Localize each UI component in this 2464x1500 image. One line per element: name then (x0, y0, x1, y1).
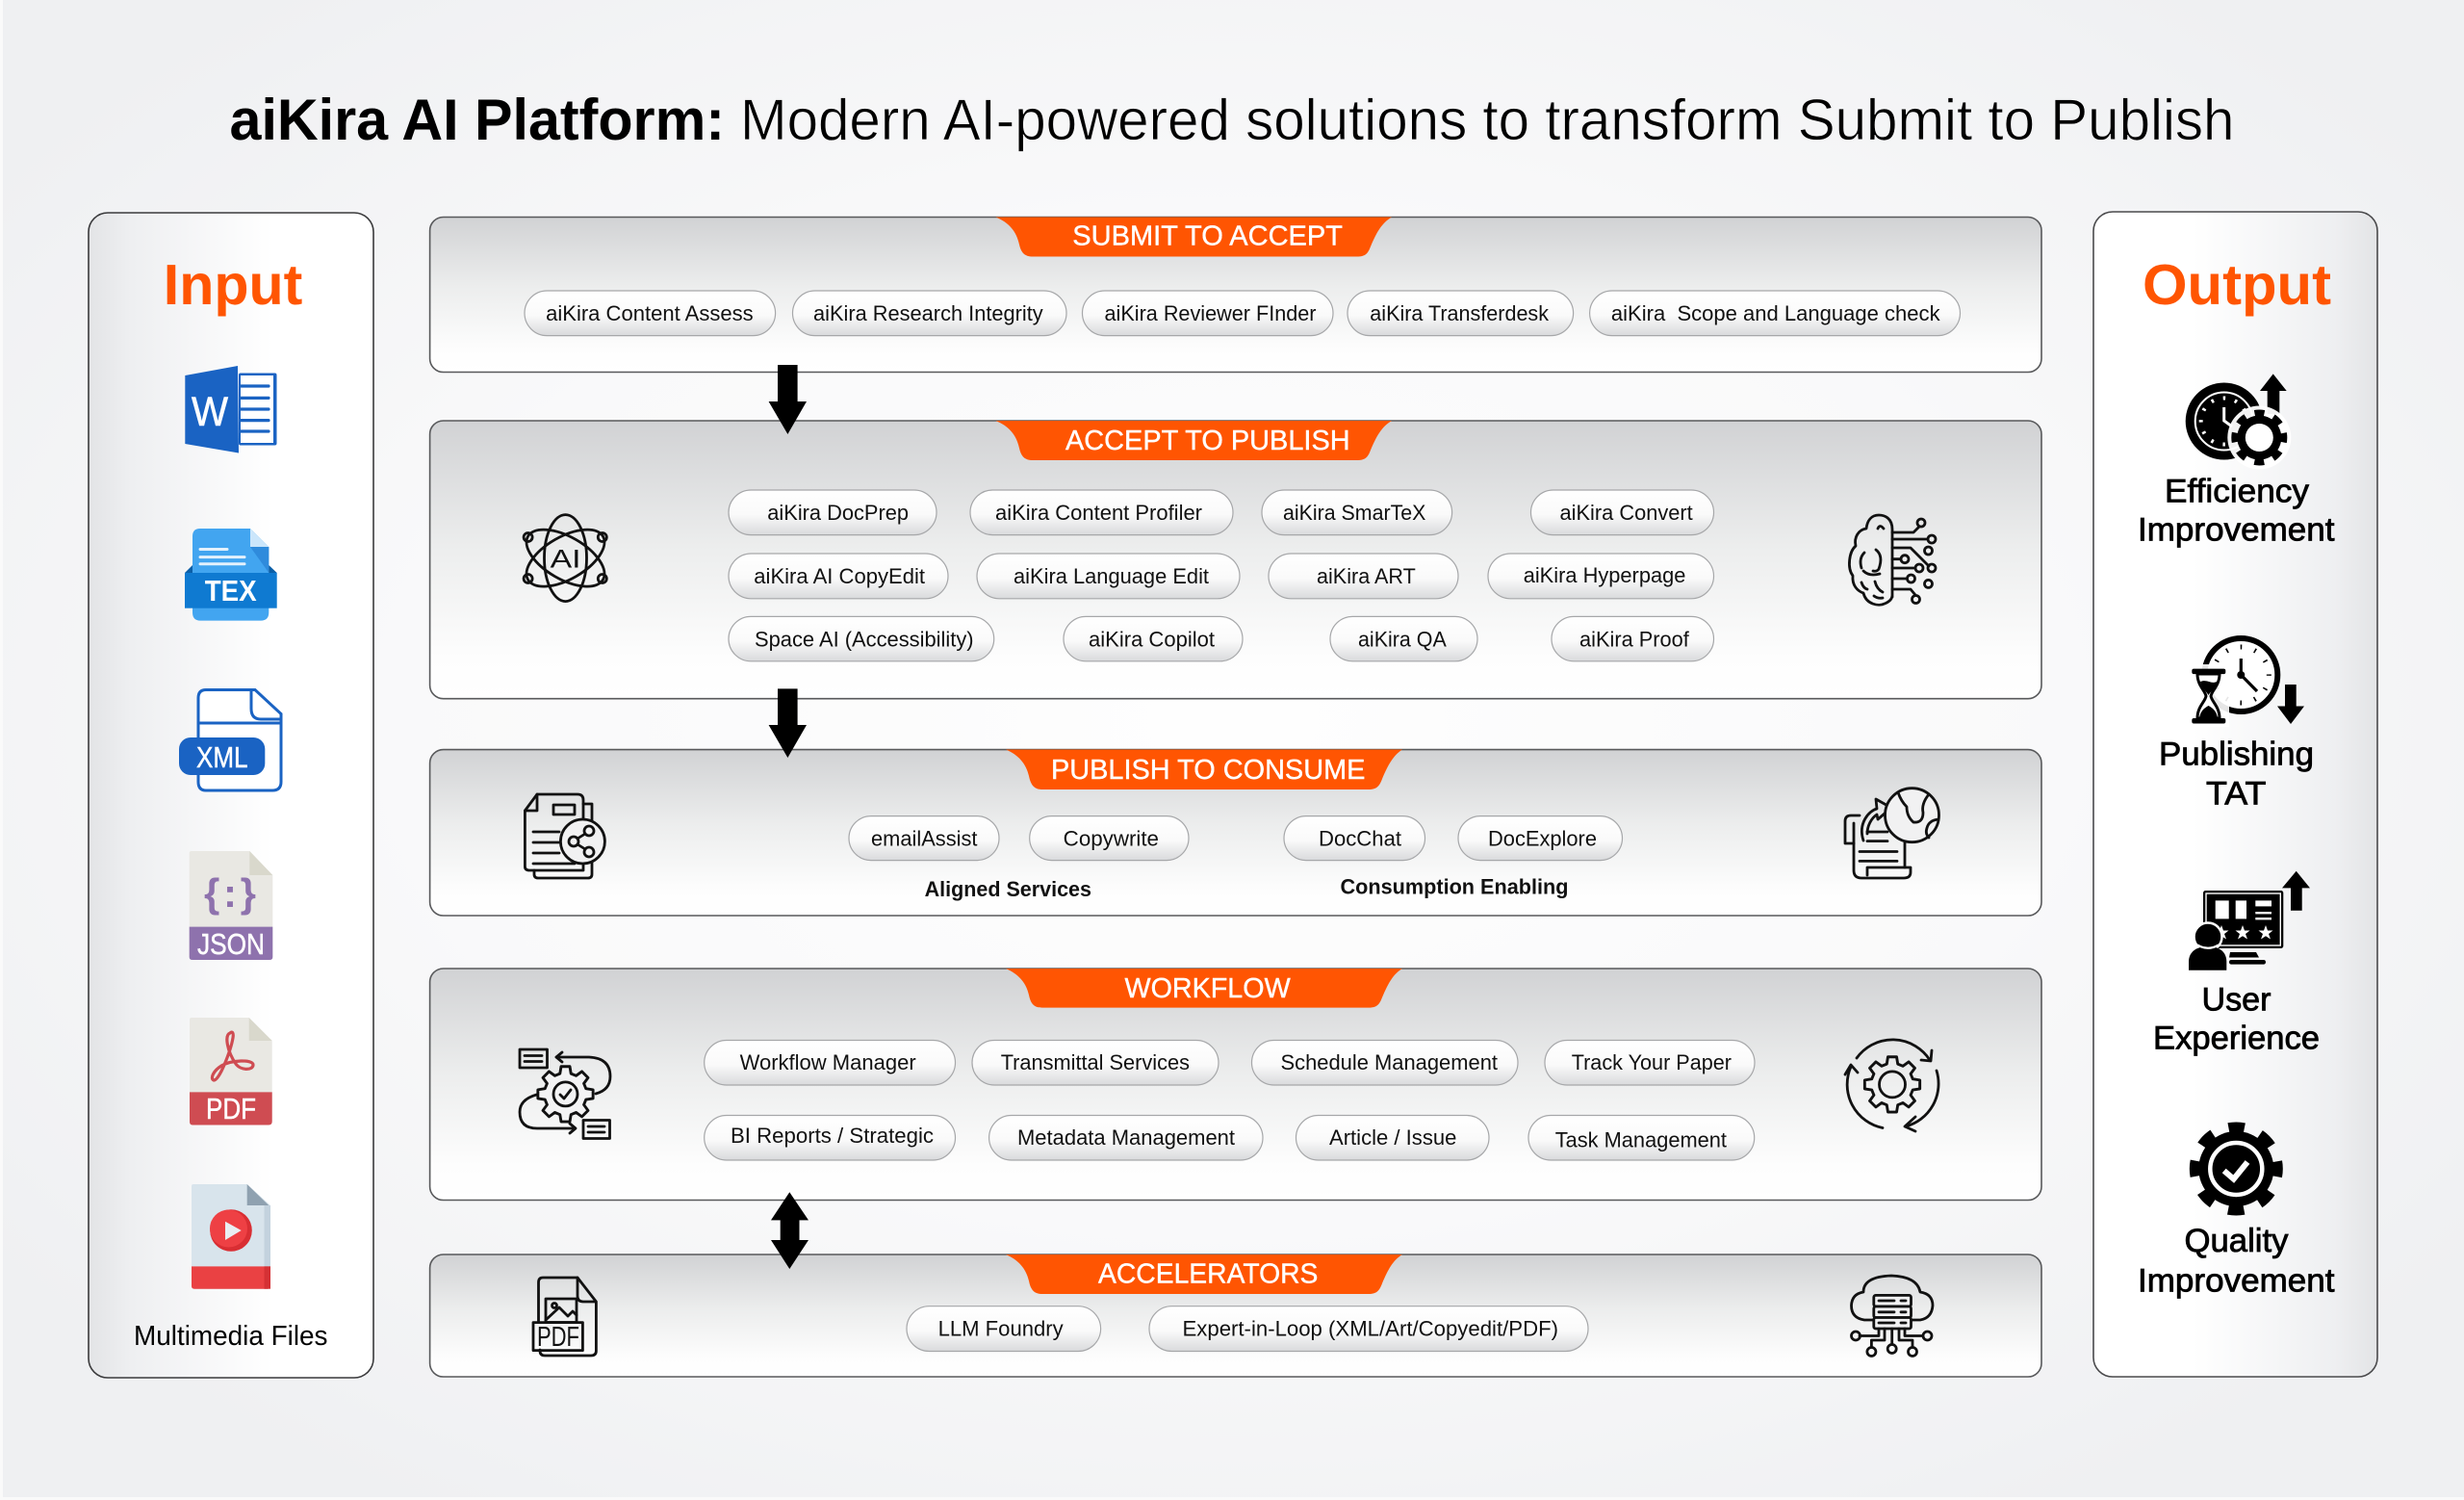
icon: ai atom (518, 515, 613, 602)
pill: llm foundry (907, 1306, 1101, 1352)
icon: json file (190, 851, 272, 961)
tab: workflow: WORKFLOW (1124, 973, 1291, 1004)
title: Modern AI-powered solutions to transform Submit to Publish (740, 88, 2235, 152)
pill: docexplore: DocExplore (1488, 826, 1597, 850)
pill: space ai (729, 616, 994, 661)
icon: cycle gear (1845, 1040, 1938, 1131)
label: user experience: Experience (2153, 1021, 2320, 1057)
icon: pdf file: PDF (206, 1092, 256, 1125)
pill: docexplore (1458, 816, 1623, 861)
icon: publishing tat (2188, 638, 2304, 727)
pill: scope and language check: aiKira Scope and Language check (1611, 301, 1941, 325)
panel: submit to accept (430, 218, 2041, 372)
pill: convert: aiKira Convert (1559, 501, 1693, 525)
panel: accelerators (430, 1254, 2041, 1377)
heading: input: Input (164, 253, 302, 317)
pill: emailassist (849, 816, 999, 861)
pill: expert in loop (1149, 1306, 1588, 1352)
arrow: accept-publish to publish-consume (769, 688, 807, 758)
pill: copywrite: Copywrite (1064, 826, 1159, 850)
pill: language edit: aiKira Language Edit (1014, 564, 1209, 588)
label: efficiency improvement: Improvement (2138, 512, 2335, 549)
icon: json file: JSON (197, 927, 265, 961)
pill: llm foundry: LLM Foundry (938, 1317, 1064, 1340)
pill: docprep: aiKira DocPrep (767, 501, 909, 525)
pill: copilot: aiKira Copilot (1089, 627, 1215, 651)
label: aligned services: Aligned Services (925, 877, 1091, 901)
title: aiKira AI Platform: (229, 88, 725, 152)
icon: efficiency (2186, 374, 2291, 470)
icon: pdf file (190, 1018, 272, 1125)
pill: proof (1552, 616, 1713, 661)
tab: accept to publish (995, 421, 1392, 460)
label: quality improvement (2138, 1223, 2335, 1299)
pill: transmittal services (972, 1040, 1219, 1085)
pill: space ai: Space AI (Accessibility) (755, 627, 974, 651)
tab: workflow (1006, 969, 1402, 1008)
pill: workflow manager (705, 1040, 955, 1085)
icon: xml file: XML (196, 740, 248, 774)
tab: publish to consume (1006, 749, 1402, 789)
pill: track your paper: Track Your Paper (1572, 1050, 1732, 1074)
pill: transmittal services: Transmittal Services (1001, 1050, 1190, 1074)
pill: docchat: DocChat (1319, 826, 1401, 850)
icon: shared document (525, 794, 604, 878)
panel: publish to consume (430, 749, 2041, 916)
label: publishing tat: TAT (2206, 776, 2266, 813)
pill: article issue (1296, 1115, 1489, 1160)
arrow: submit to accept-publish (769, 365, 807, 434)
icon: xml file (179, 689, 281, 790)
pill: copywrite (1030, 816, 1189, 861)
pill: content profiler (970, 490, 1233, 535)
pill: art (1269, 554, 1458, 599)
pill: ai copyedit (729, 554, 948, 599)
tab: submit to accept (995, 218, 1392, 256)
pill: schedule management (1251, 1040, 1518, 1085)
icon: tex file (185, 529, 277, 621)
pill: smartex (1262, 490, 1452, 535)
label: publishing tat (2159, 737, 2314, 813)
label: user experience (2153, 981, 2320, 1057)
icon: pdf document: PDF (537, 1322, 579, 1353)
pill: proof: aiKira Proof (1579, 627, 1690, 651)
panel: input (89, 213, 373, 1378)
pill: research integrity (793, 291, 1066, 336)
pill: emailassist: emailAssist (871, 826, 978, 850)
pill: art: aiKira ART (1317, 564, 1416, 588)
icon: workflow gear (520, 1049, 610, 1138)
icon: ai atom: AI (551, 544, 581, 573)
pill: copilot (1064, 616, 1243, 661)
pill: expert in loop: Expert-in-Loop (XML/Art/Copyedit/PDF) (1182, 1317, 1558, 1340)
pill: scope and language check (1590, 291, 1960, 336)
label: efficiency improvement: Efficiency (2165, 473, 2310, 509)
pill: metadata management: Metadata Management (1017, 1125, 1235, 1150)
icon: word file (185, 366, 277, 453)
icon: pdf document (533, 1278, 596, 1356)
pill: ai copyedit: aiKira AI CopyEdit (754, 564, 925, 588)
icon: globe publishing (1845, 789, 1938, 878)
pill: hyperpage (1488, 554, 1713, 599)
pill: reviewer finder: aiKira Reviewer FInder (1105, 301, 1317, 325)
pill: docprep (729, 490, 937, 535)
tab: submit to accept: SUBMIT TO ACCEPT (1072, 221, 1343, 252)
pill: task management: Task Management (1555, 1128, 1727, 1151)
pill: track your paper (1545, 1040, 1755, 1085)
pill: bi reports (705, 1115, 955, 1160)
pill: task management (1528, 1115, 1755, 1160)
icon: user experience (2189, 871, 2310, 970)
panel: workflow (430, 969, 2041, 1200)
heading: output: Output (2143, 253, 2331, 317)
label: quality improvement: Improvement (2138, 1262, 2335, 1299)
tab: accelerators: ACCELERATORS (1098, 1258, 1318, 1289)
pill: content profiler: aiKira Content Profiler (995, 501, 1202, 525)
pill: transferdesk (1348, 291, 1574, 336)
pill: schedule management: Schedule Management (1280, 1050, 1498, 1074)
tab: publish to consume: PUBLISH TO CONSUME (1051, 755, 1365, 786)
pill: content assess (525, 291, 776, 336)
pill: transferdesk: aiKira Transferdesk (1370, 301, 1550, 325)
pill: bi reports: BI Reports / Strategic (731, 1124, 934, 1148)
pill: workflow manager: Workflow Manager (740, 1050, 916, 1074)
pill: content assess: aiKira Content Assess (546, 301, 754, 325)
pill: language edit (977, 554, 1240, 599)
pill: article issue: Article / Issue (1329, 1125, 1456, 1150)
icon: quality improvement (2195, 1128, 2276, 1209)
panel: output (2093, 212, 2377, 1377)
icon: cloud server (1852, 1276, 1933, 1356)
label: user experience: User (2202, 981, 2272, 1018)
label: multimedia files: Multimedia Files (134, 1321, 327, 1352)
label: publishing tat: Publishing (2159, 737, 2314, 773)
icon: brain circuit (1849, 515, 1936, 605)
icon: tex file: TEX (205, 574, 257, 608)
pill: qa: aiKira QA (1358, 627, 1447, 651)
pill: docchat (1284, 816, 1424, 861)
pill: reviewer finder (1082, 291, 1333, 336)
label: consumption enabling: Consumption Enabling (1340, 875, 1569, 899)
pill: hyperpage: aiKira Hyperpage (1524, 563, 1685, 587)
label: quality improvement: Quality (2185, 1223, 2289, 1259)
tab: accept to publish: ACCEPT TO PUBLISH (1065, 426, 1350, 456)
pill: smartex: aiKira SmarTeX (1283, 501, 1426, 525)
label: efficiency improvement (2138, 473, 2335, 549)
icon: word file: W (192, 389, 228, 435)
pill: convert (1530, 490, 1713, 535)
tab: accelerators (1006, 1254, 1402, 1294)
icon: json file: {:} (204, 870, 256, 916)
icon: multimedia file (192, 1184, 270, 1289)
panel: accept to publish (430, 421, 2041, 699)
pill: research integrity: aiKira Research Integrity (813, 301, 1043, 325)
arrow: workflow accelerators double (771, 1192, 808, 1269)
pill: metadata management (989, 1115, 1263, 1160)
pill: qa (1330, 616, 1477, 661)
